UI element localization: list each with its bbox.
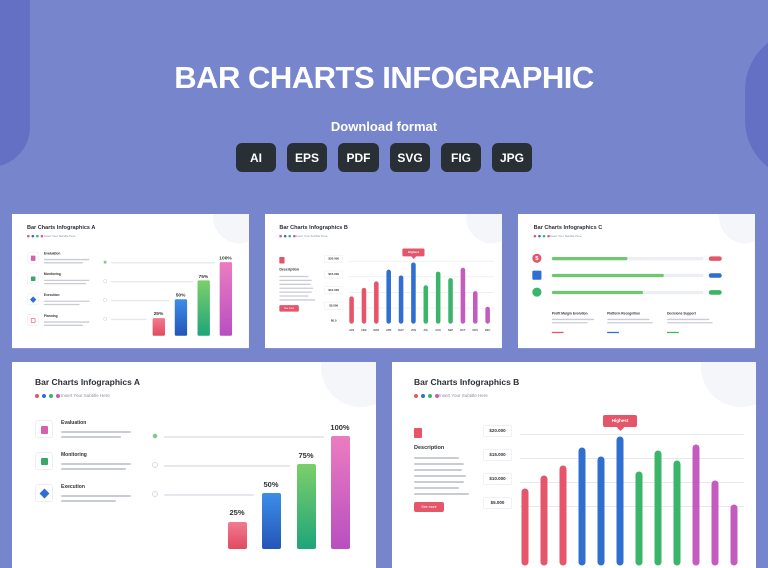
subtitle: download format: Download format <box>331 119 437 134</box>
panel: small card A: 50% <box>176 292 185 298</box>
panel: large card A: Insert Your Subtitle Here <box>61 393 110 398</box>
panel: small card B: $0.0 <box>331 319 337 322</box>
panel: small card C <box>518 214 755 348</box>
background blob left <box>0 0 30 167</box>
panel: small card B: $15.000 <box>328 273 339 276</box>
panel: small card B: Description <box>279 268 299 272</box>
panel: large card B: $20.000 <box>489 428 506 433</box>
panel: small card B: JAN <box>349 328 354 332</box>
panel: large card A: 75% <box>298 451 314 460</box>
panel: small card B: FEB <box>361 328 367 332</box>
format badges: JPG <box>500 150 524 164</box>
panel: small card B: $20.000 <box>328 257 339 260</box>
panel: large card A <box>12 362 376 568</box>
panel: small card A: 75% <box>199 273 208 279</box>
panel: small card B: Bar Charts Infographics B <box>279 224 348 230</box>
panel: small card B: Insert Your Subtitle Here <box>296 234 327 237</box>
format badges <box>236 143 532 172</box>
panel: small card C: Decisions Support <box>667 312 696 316</box>
panel: large card B: Description <box>414 445 444 451</box>
panel: small card A: Evaluation <box>44 252 60 256</box>
panel: small card C: Insert Your Subtitle Here <box>550 234 582 237</box>
panel: large card A: Bar Charts Infographics A <box>35 377 140 387</box>
panel: large card B: See more <box>421 505 437 509</box>
format badges: EPS <box>295 150 319 164</box>
panel: small card A: Insert Your Subtitle Here <box>44 234 76 237</box>
panel: small card B: JUL <box>423 328 429 332</box>
panel: small card A: 100% <box>219 255 232 261</box>
panel: small card C: Profit Margin Evolution <box>552 312 588 316</box>
format badges: SVG <box>397 150 423 164</box>
format badges: FIG <box>451 150 471 164</box>
panel: small card B: SEP <box>448 328 453 332</box>
background blob right <box>745 30 768 180</box>
panel: small card C: Bar Charts Infographics C <box>534 224 602 230</box>
panel: large card A: 25% <box>229 508 244 517</box>
panel: large card B: $5.000 <box>491 500 504 505</box>
panel: small card B: $5.000 <box>329 304 338 307</box>
panel: large card B: $15.000 <box>489 452 506 457</box>
panel: small card B: Highest <box>408 250 419 254</box>
panel: small card B: APR <box>386 328 392 332</box>
panel: small card A: 25% <box>154 310 163 316</box>
panel: small card A: Bar Charts Infographics A <box>27 224 95 230</box>
panel: large card B: Highest <box>612 418 628 423</box>
panel: small card B <box>265 214 502 348</box>
panel: large card B <box>392 362 756 568</box>
panel: large card A: 50% <box>263 480 278 489</box>
panel: large card A: Monitoring <box>61 452 87 458</box>
panel: small card A: Execution <box>44 293 59 297</box>
panel: small card B: MAR <box>373 328 379 332</box>
panel: small card B: NOV <box>472 328 478 332</box>
panel: large card A: Execution <box>61 484 85 490</box>
panel: small card C: Platform Recognition <box>607 312 640 316</box>
panel: small card B: DEC <box>485 328 491 332</box>
format badges: PDF <box>346 150 370 164</box>
panel: small card B: AUG <box>435 328 441 332</box>
panel: small card B: JUN <box>411 328 416 332</box>
title: BAR CHARTS INFOGRAPHIC <box>174 60 594 95</box>
panel: small card B: See more <box>284 307 294 310</box>
panel: small card A: Planning <box>44 314 58 318</box>
format badges: AI <box>250 150 262 164</box>
panel: large card B: $10.000 <box>489 476 506 481</box>
panel: small card B: $10.000 <box>328 288 339 291</box>
panel: small card A: Monitoring <box>44 273 61 276</box>
panel: large card A: Evaluation <box>61 420 86 426</box>
panel: small card B: OCT <box>460 328 466 332</box>
panel: large card B: Bar Charts Infographics B <box>414 377 519 387</box>
panel: small card C: $ <box>535 255 539 262</box>
panel: small card A <box>12 214 249 348</box>
panel: small card B: MAY <box>398 328 404 332</box>
panel: large card A: 100% <box>330 423 350 432</box>
panel: large card B: Insert Your Subtitle Here <box>439 393 488 398</box>
